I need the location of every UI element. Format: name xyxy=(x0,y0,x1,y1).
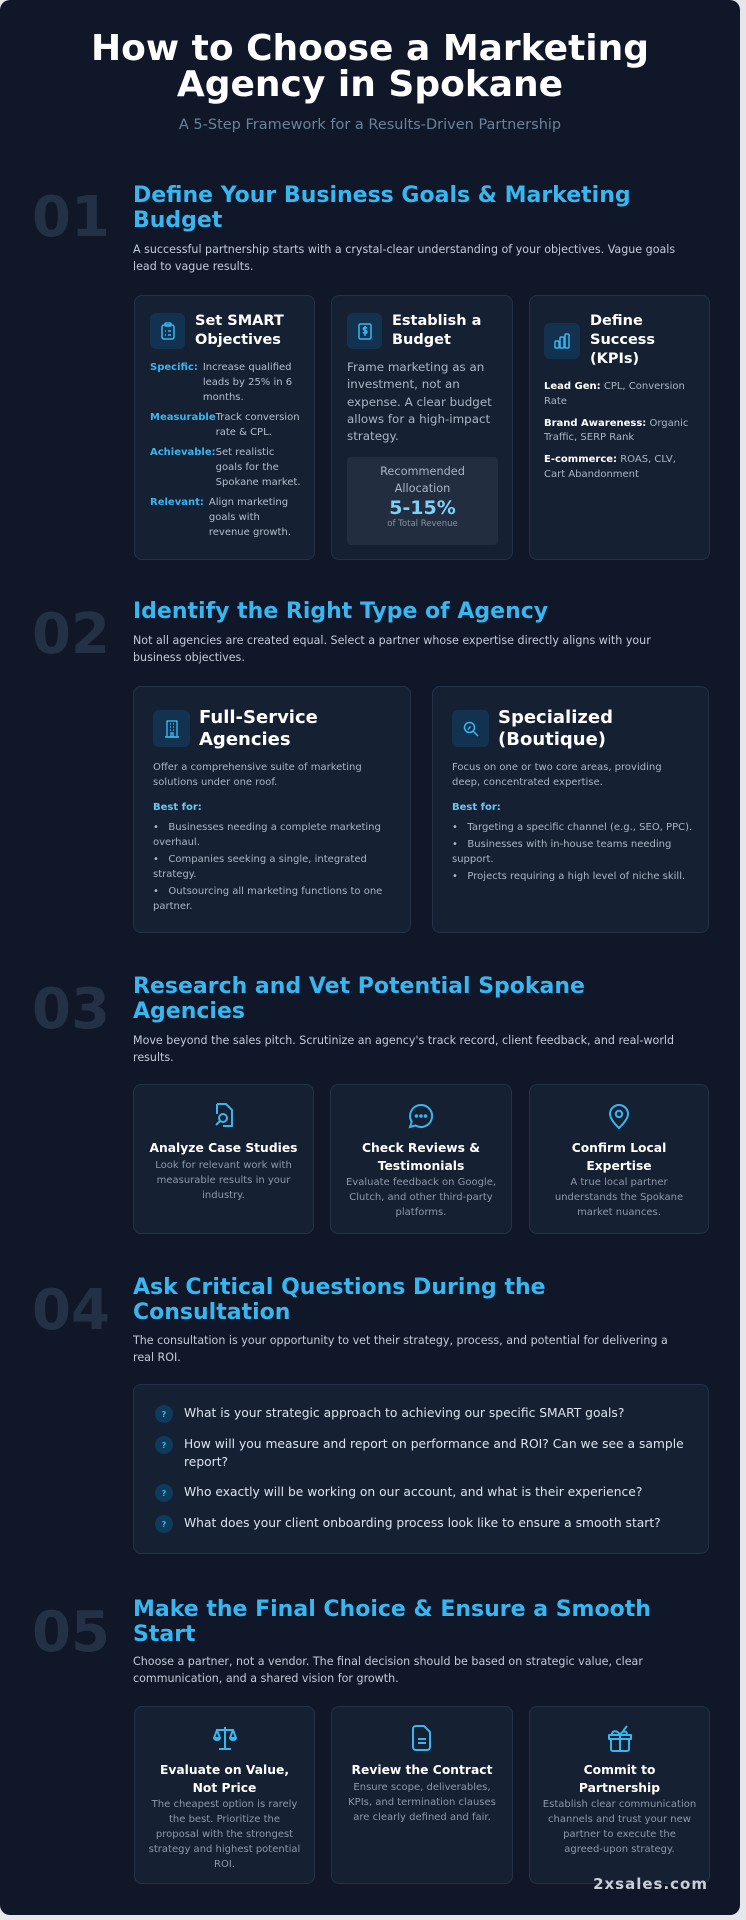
bullet list: strategy. xyxy=(153,869,196,880)
text: step 3 intro: results. xyxy=(133,1051,174,1064)
step number 02: 02 xyxy=(32,602,110,667)
label: best for: Best for: xyxy=(452,802,501,813)
text: step 1 intro: lead to vague results. xyxy=(133,260,253,273)
body text: expense. A clear budget xyxy=(347,395,492,409)
icon: magnifier xyxy=(452,710,489,747)
SMART list: Achievable: xyxy=(150,447,216,458)
SMART list: Track conversion xyxy=(216,412,300,423)
SMART list: Align marketing xyxy=(209,497,288,508)
card text: partner to execute the xyxy=(563,1829,676,1840)
card title: Full-Service xyxy=(199,707,318,728)
panel: budget xyxy=(331,295,513,560)
card text: Clutch, and other third-party xyxy=(349,1192,493,1203)
card text: Ensure scope, deliverables, xyxy=(353,1782,491,1792)
title xyxy=(91,28,649,105)
question 2 xyxy=(155,1436,684,1468)
card text: A true local partner xyxy=(570,1177,668,1188)
heading: step 4: Consultation xyxy=(133,1300,290,1325)
watermark: 2xsales.com xyxy=(593,1875,708,1893)
card title: Define xyxy=(590,313,643,329)
card text: KPIs, and termination clauses xyxy=(348,1796,496,1808)
panel: evaluate on value xyxy=(134,1706,315,1884)
KPI list: Brand Awareness: Organic xyxy=(544,418,688,428)
card title xyxy=(199,707,318,750)
text: step 1 intro xyxy=(133,243,675,273)
step number 01: 01 xyxy=(32,185,110,250)
body text: strategy. xyxy=(347,429,399,443)
text: step 4 intro: real ROI. xyxy=(133,1351,181,1364)
callout: recommended allocation: Recommended xyxy=(380,465,465,478)
heading: step 3 xyxy=(133,974,585,1024)
card text: strategy and highest potential xyxy=(149,1844,300,1855)
card text: Establish clear communication xyxy=(543,1799,696,1810)
icon: document search xyxy=(215,1103,233,1127)
text: step 5 intro: Choose a partner, not a vendor. The final decision should be based on strategic value, clear xyxy=(133,1655,643,1668)
bullet list: overhaul. xyxy=(153,837,200,848)
heading: step 5 xyxy=(133,1597,651,1647)
bullet list: • Businesses with in-house teams needing xyxy=(452,839,671,850)
heading: step 1 xyxy=(133,183,631,233)
icon: partnership gift xyxy=(608,1725,632,1752)
description: Focus on one or two core areas, providing xyxy=(452,762,662,773)
text: step 2 intro xyxy=(133,634,651,664)
callout: recommended allocation: Allocation xyxy=(395,482,450,495)
SMART list: Relevant: xyxy=(150,497,204,508)
icon: clipboard xyxy=(150,313,185,349)
card text xyxy=(348,1782,496,1822)
panel: check reviews xyxy=(330,1084,512,1234)
card text xyxy=(530,1797,709,1857)
SMART list: revenue growth. xyxy=(209,527,291,538)
heading: step 5: Start xyxy=(133,1622,196,1647)
text: step 4 intro: The consultation is your opportunity to vet their strategy, process, and potential for delivering a xyxy=(133,1334,668,1347)
card title: Check Reviews & xyxy=(362,1141,480,1155)
callout: recommended allocation: 5-15% xyxy=(389,497,456,519)
card text: The cheapest option is rarely xyxy=(152,1799,297,1810)
card title: Commit to xyxy=(584,1763,655,1777)
question 2: report? xyxy=(184,1454,228,1468)
card text: ROI. xyxy=(214,1859,235,1870)
card title xyxy=(498,707,613,750)
card title: Confirm Local xyxy=(572,1141,666,1155)
step number 03: 03 xyxy=(32,977,110,1042)
label: best for: Best for: xyxy=(153,802,202,813)
card title: Set SMART xyxy=(195,313,284,329)
panel: commit to partnership xyxy=(529,1706,710,1884)
question 2: How will you measure and report on performance and ROI? Can we see a sample xyxy=(184,1437,684,1451)
KPI list: Lead Gen: CPL, Conversion xyxy=(544,381,685,392)
callout: recommended allocation: of Total Revenue xyxy=(387,519,458,529)
card title xyxy=(590,313,655,367)
body text: allows for a high-impact xyxy=(347,412,490,426)
icon: scale xyxy=(213,1727,237,1750)
title: Agency in Spokane xyxy=(177,64,563,105)
step number 04: 04 xyxy=(32,1278,110,1343)
description: Offer a comprehensive suite of marketing xyxy=(153,762,362,773)
bullet list: • Outsourcing all marketing functions to one xyxy=(153,886,382,897)
heading: step 1: Define Your Business Goals & Marketing xyxy=(133,183,631,208)
card text xyxy=(555,1177,683,1218)
bullet list xyxy=(452,822,692,882)
card text: Evaluate feedback on Google, xyxy=(346,1177,496,1188)
card title: Not Price xyxy=(193,1780,256,1794)
SMART list: Set realistic xyxy=(216,447,274,458)
icon: bar chart xyxy=(544,323,580,359)
panel: SMART objectives xyxy=(134,295,315,560)
body text: investment, not an xyxy=(347,377,460,391)
KPI list: Traffic, SERP Rank xyxy=(544,432,634,443)
SMART list: goals with xyxy=(209,512,260,523)
question 1: What is your strategic approach to achieving our specific SMART goals? xyxy=(184,1406,624,1420)
card title: Specialized xyxy=(498,707,613,728)
card title: Testimonials xyxy=(378,1158,464,1172)
SMART list: Measurable xyxy=(150,412,216,423)
card text: platforms. xyxy=(396,1207,446,1218)
bullet list: support. xyxy=(452,854,494,865)
card title: (Boutique) xyxy=(498,729,606,750)
card text: market nuances. xyxy=(577,1207,661,1218)
text: step 4 intro xyxy=(132,1334,668,1364)
SMART list: Specific: xyxy=(150,362,198,373)
heading: step 3: Research and Vet Potential Spokane xyxy=(133,974,585,999)
SMART list xyxy=(150,362,301,538)
card title xyxy=(392,313,481,348)
card title: Objectives xyxy=(195,332,281,348)
SMART list: goals for the xyxy=(216,462,279,473)
text: step 2 intro: Not all agencies are created equal. Select a partner whose expertise directly aligns with your xyxy=(133,634,651,647)
question 1: ? xyxy=(162,1410,166,1418)
heading: step 5: Make the Final Choice & Ensure a Smooth xyxy=(133,1597,651,1622)
card text: agreed-upon strategy. xyxy=(564,1844,675,1855)
card title: Budget xyxy=(392,332,451,348)
heading: step 1: Budget xyxy=(133,208,222,233)
card title: Partnership xyxy=(579,1780,660,1794)
text: step 5 intro xyxy=(133,1655,643,1685)
panel: specialized boutique xyxy=(432,686,709,933)
text: step 5 intro: communication, and a shared vision for growth. xyxy=(133,1672,399,1685)
card title: Evaluate on Value, xyxy=(160,1763,289,1777)
panel: analyze case studies xyxy=(133,1084,314,1234)
subtitle: A 5-Step Framework for a Results-Driven Partnership xyxy=(179,117,561,133)
title: How to Choose a Marketing xyxy=(91,28,649,69)
description xyxy=(452,762,662,788)
description: solutions under one roof. xyxy=(153,776,277,788)
text: step 3 intro: Move beyond the sales pitch. Scrutinize an agency's track record, client feedback, and real-world xyxy=(133,1034,674,1047)
icon: dollar document xyxy=(347,313,382,349)
card title: (KPIs) xyxy=(590,351,639,367)
SMART list: Spokane market. xyxy=(216,477,301,488)
icon: chat bubble xyxy=(408,1104,434,1128)
icon: document xyxy=(412,1725,431,1751)
KPI list xyxy=(544,381,688,480)
description xyxy=(153,762,362,788)
panel: full-service agencies xyxy=(133,686,411,933)
SMART list: Increase qualified xyxy=(203,362,292,373)
bullet list: • Projects requiring a high level of niche skill. xyxy=(452,871,685,882)
SMART list: months. xyxy=(203,392,244,403)
card title: Success xyxy=(590,332,655,348)
card title xyxy=(362,1141,480,1172)
card text: measurable results in your xyxy=(157,1174,290,1186)
bullet list: • Companies seeking a single, integrated xyxy=(153,854,367,865)
text: step 1 intro: A successful partnership starts with a crystal-clear understanding of your objectives. Vague goals xyxy=(133,243,675,256)
text: step 3 intro xyxy=(133,1034,674,1064)
panel: local expertise xyxy=(529,1084,709,1234)
bullet list: • Businesses needing a complete marketing xyxy=(153,822,381,833)
text: step 2 intro: business objectives. xyxy=(133,651,245,664)
callout: recommended allocation xyxy=(347,457,498,545)
KPI list: Rate xyxy=(544,396,567,406)
question 2: ? xyxy=(162,1440,166,1450)
icon: building xyxy=(153,710,190,747)
card text xyxy=(155,1160,292,1200)
bullet list: partner. xyxy=(153,901,192,912)
icon: map pin xyxy=(609,1104,629,1130)
SMART list: leads by 25% in 6 xyxy=(203,377,292,388)
card title xyxy=(530,1762,709,1797)
panel: KPIs xyxy=(529,295,710,560)
question 3: Who exactly will be working on our account, and what is their experience? xyxy=(184,1485,642,1499)
bullet list xyxy=(153,822,382,912)
question 4: What does your client onboarding process look like to ensure a smooth start? xyxy=(184,1516,661,1530)
card text xyxy=(149,1799,300,1870)
card title: Agencies xyxy=(199,729,291,750)
card text: industry. xyxy=(202,1190,245,1200)
heading: step 2: Identify the Right Type of Agency xyxy=(133,599,548,624)
panel: question list xyxy=(133,1384,709,1554)
heading: step 4: Ask Critical Questions During the xyxy=(133,1275,546,1300)
card text: are clearly defined and fair. xyxy=(353,1812,491,1822)
KPI list: Cart Abandonment xyxy=(544,468,639,480)
question 3: ? xyxy=(162,1488,166,1498)
card title xyxy=(572,1141,666,1172)
card title xyxy=(195,313,284,348)
panel: review contract xyxy=(331,1706,513,1884)
card title xyxy=(160,1763,289,1794)
card text: understands the Spokane xyxy=(555,1192,683,1203)
card text xyxy=(346,1177,496,1218)
body text xyxy=(347,360,492,443)
card title: Expertise xyxy=(586,1158,652,1172)
card title: Review the Contract xyxy=(352,1763,492,1777)
card title: Analyze Case Studies xyxy=(149,1141,298,1155)
description: deep, concentrated expertise. xyxy=(452,776,603,788)
card title: Establish a xyxy=(392,313,481,329)
question 4: ? xyxy=(162,1520,166,1528)
card text: channels and trust your new xyxy=(548,1814,691,1825)
body text: Frame marketing as an xyxy=(347,360,484,374)
step number 05: 05 xyxy=(32,1600,110,1665)
card text: proposal with the strongest xyxy=(156,1829,293,1840)
KPI list: E-commerce: ROAS, CLV, xyxy=(544,454,676,465)
SMART list: rate & CPL. xyxy=(216,427,272,438)
card text: the best. Prioritize the xyxy=(169,1814,280,1825)
heading: step 4 xyxy=(133,1275,546,1325)
card text: Look for relevant work with xyxy=(155,1160,292,1170)
heading: step 3: Agencies xyxy=(133,999,245,1024)
bullet list: • Targeting a specific channel (e.g., SEO, PPC). xyxy=(452,822,692,833)
